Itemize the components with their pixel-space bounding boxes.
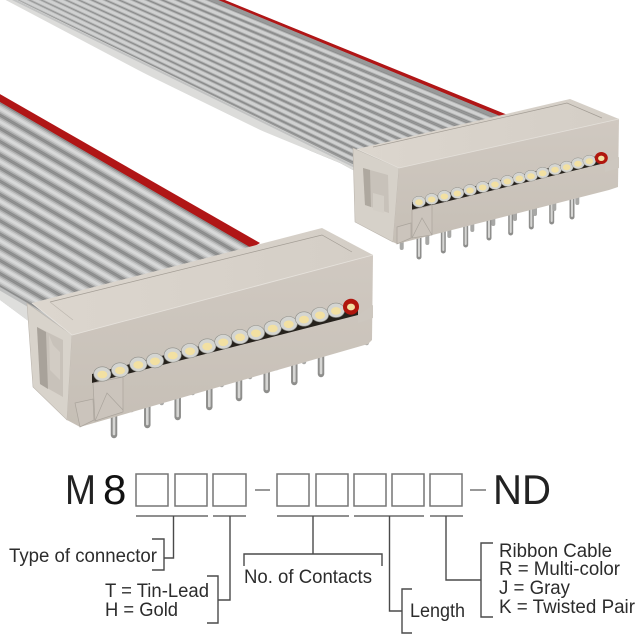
callout: ribbon cable: K = Twisted Pair xyxy=(499,597,636,618)
callout: number of contacts xyxy=(244,516,382,588)
front contacts xyxy=(94,299,359,381)
front connector front face xyxy=(67,255,373,427)
callout: ribbon cable: J = Gray xyxy=(499,578,570,599)
callout: plating xyxy=(105,516,230,623)
front keying notch xyxy=(75,305,373,427)
rear connector xyxy=(353,99,619,257)
callout: ribbon cable: Ribbon Cable xyxy=(499,541,612,562)
callout: ribbon cable: R = Multi-color xyxy=(499,559,621,580)
callout: plating: H = Gold xyxy=(105,600,178,621)
front ribbon cable xyxy=(0,94,260,328)
rear contacts xyxy=(412,152,608,207)
rear long pins xyxy=(402,190,577,257)
front long pins xyxy=(114,335,367,435)
rear gray wires xyxy=(6,0,500,170)
callout: plating: T = Tin-Lead xyxy=(105,581,209,602)
rear connector left face xyxy=(353,148,399,242)
front contact slot xyxy=(92,305,358,383)
callout: type of connector xyxy=(9,516,174,570)
front gray wires xyxy=(0,102,250,328)
front connector left face xyxy=(27,303,72,420)
rear contact slot xyxy=(412,154,605,210)
front connector top face xyxy=(32,228,373,335)
code boxes xyxy=(136,474,486,506)
front red stripe xyxy=(0,93,260,252)
callout: length xyxy=(390,516,465,633)
underlines below code boxes xyxy=(136,515,463,517)
rear connector front face xyxy=(393,119,619,244)
rear keying notch xyxy=(397,157,619,244)
prefix M: M xyxy=(65,466,96,513)
rear red stripe xyxy=(205,0,520,130)
callout: length: Length xyxy=(410,601,465,622)
callout: type of connector: Type of connector xyxy=(9,546,158,567)
callout: ribbon cable xyxy=(446,516,636,618)
part number heading xyxy=(65,466,551,513)
prefix 8: 8 xyxy=(103,466,126,513)
callout: number of contacts: No. of Contacts xyxy=(244,567,372,588)
suffix ND: ND xyxy=(493,466,551,513)
rear ribbon cable xyxy=(6,0,506,170)
rear connector top face xyxy=(357,99,619,168)
front connector xyxy=(27,228,373,435)
